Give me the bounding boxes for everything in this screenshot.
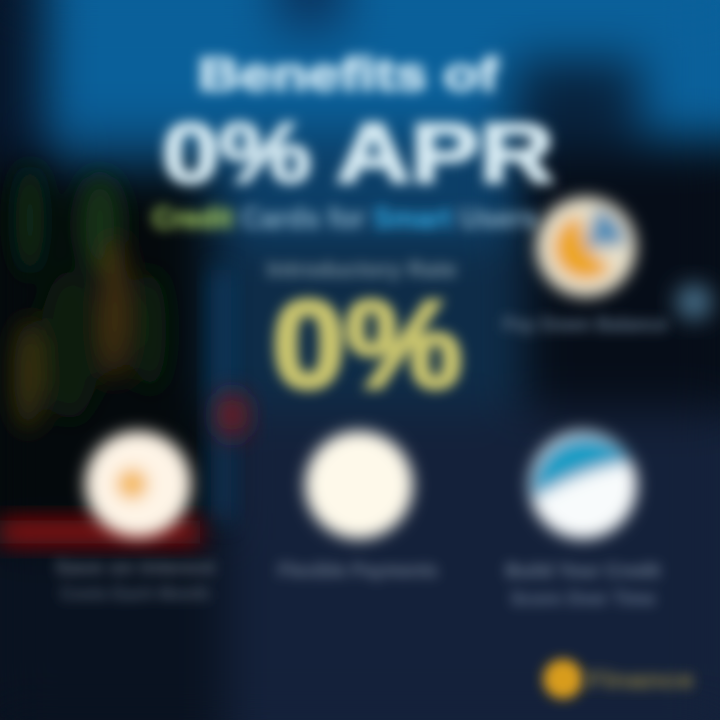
small side icon	[677, 285, 711, 319]
text: left benefit caption: Costs Each Month	[60, 584, 210, 605]
icon: left benefit circle	[85, 431, 191, 537]
icon: right benefit circle	[529, 431, 637, 539]
text: right benefit caption	[506, 561, 661, 610]
big figure 0%: 0%	[272, 276, 462, 414]
text: left benefit caption: Save on Interest	[55, 558, 216, 579]
logo wordmark: Finance	[586, 667, 694, 694]
text: right benefit caption: Score Over Time	[510, 589, 656, 610]
icon: centre benefit circle	[305, 431, 413, 539]
text: centre benefit caption: Flexible Payments	[278, 560, 438, 582]
caption above big figure: Introductory Rate	[267, 257, 457, 282]
red bar	[0, 520, 200, 544]
logo group	[543, 659, 694, 699]
icon: pie chart circle	[536, 197, 636, 297]
logo badge	[543, 659, 583, 699]
plant silhouette	[14, 165, 166, 430]
text: pie caption: Pay Down Balance	[502, 314, 668, 336]
text: right benefit caption: Build Your Credit	[506, 561, 661, 582]
dark red accent	[216, 391, 248, 439]
title: 0% APR: 0% APR	[162, 106, 554, 200]
text: left benefit caption	[55, 558, 216, 605]
subtitle: Credit Cards for Smart Users	[152, 202, 538, 235]
title: Benefits of: Benefits of	[198, 48, 499, 100]
